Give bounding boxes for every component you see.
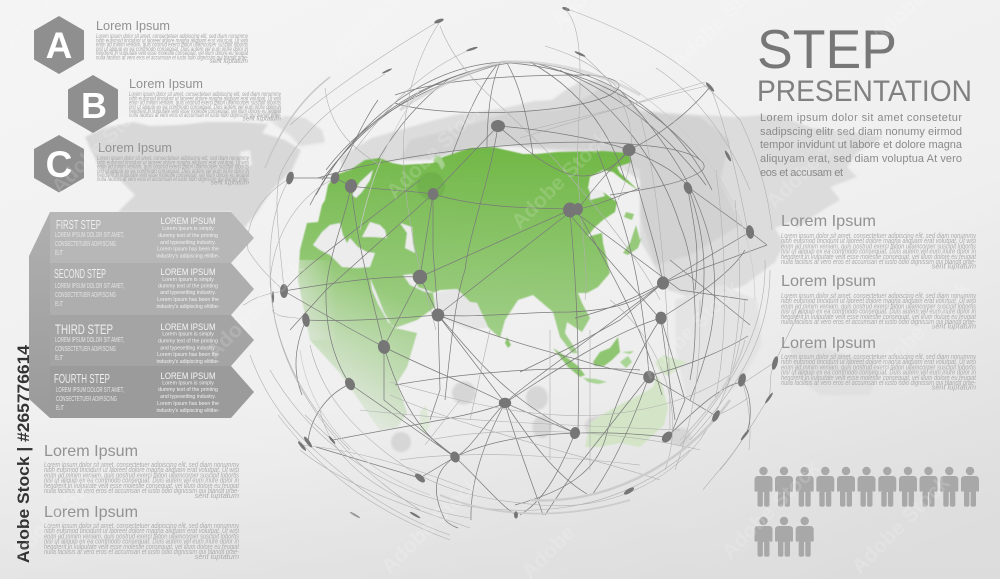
- step 1: and typesetting industry.: [160, 240, 216, 246]
- step 2: Lorem Ipsum has been the: [157, 297, 219, 303]
- text block B: [129, 77, 282, 122]
- right text block 2: [781, 273, 977, 330]
- left text block 2: nibh euismod tincidunt ut laoreet dolore magna aliquam erat volutpat. Ut wisi: [44, 526, 239, 535]
- text block B: Lorem ipsum dolor sit amet, consectetuer adipiscing elit, sed diam nonummy: [129, 91, 282, 98]
- back-of-globe spots: [391, 382, 691, 452]
- text block B: nibh euismod tincidunt ut laoreet dolore magna aliquam erat volutpat. Ut wisi: [129, 95, 281, 102]
- text block C: [97, 141, 250, 186]
- left text block 2: enim ad minim veniam, quis nostrud exerci tation ullamcorper suscipit lobortis: [44, 531, 239, 540]
- text block C: enim ad minim veniam, quis nostrud exerci tation ullamcorper suscipit lobortis: [97, 164, 250, 171]
- left text block 2: sent luptatum: [195, 552, 239, 561]
- folded left edge: [29, 212, 50, 418]
- hexagon badge B: B: [81, 85, 107, 126]
- title: [757, 18, 972, 108]
- right text block 3: [781, 335, 977, 392]
- text block A: nisl ut aliquip ex ea commodo consequat. Duis autem vel eum iriure dolor in: [96, 46, 248, 53]
- grey world map: [85, 80, 883, 452]
- stock watermark: Adobe Stock: [762, 106, 870, 214]
- text block A: Lorem Ipsum: [96, 19, 170, 33]
- seas: [313, 223, 375, 268]
- step 3: and typesetting industry.: [160, 346, 216, 352]
- text block B: enim ad minim veniam, quis nostrud exerci tation ullamcorper suscipit lobortis: [129, 100, 282, 107]
- right text block 1: [781, 213, 977, 270]
- text block B: sent luptatum: [243, 116, 282, 122]
- intro paragraph: aliquyam erat, sed diam voluptua At vero: [760, 153, 962, 165]
- step 4: dummy text of the printing: [158, 387, 218, 393]
- step 1: dummy text of the printing: [158, 233, 218, 239]
- step 2: and typesetting industry.: [160, 290, 216, 296]
- step 3: Lorem Ipsum is simply: [162, 332, 214, 338]
- stock watermark: Adobe Stock: [867, 276, 975, 384]
- step 3: [50, 315, 254, 366]
- text block B: Lorem Ipsum: [129, 77, 203, 91]
- right text block 3: sent luptatum: [932, 382, 976, 392]
- people pictogram: [754, 467, 979, 557]
- right text block 2: sent luptatum: [932, 322, 976, 330]
- stock watermark: Adobe Stock: [47, 91, 155, 199]
- step 4: ELIT: [56, 405, 64, 412]
- stock watermark: Adobe Stock: [847, 471, 955, 579]
- step 1: LOREM IPSUM DOLOR SIT AMET,: [55, 232, 124, 239]
- node dots: [272, 6, 779, 519]
- intro paragraph: eos et accusam et: [760, 167, 843, 179]
- text block A: Lorem ipsum dolor sit amet, consectetuer adipiscing elit, sed diam nonummy: [96, 33, 249, 40]
- stock watermark: Adobe Stock: [7, 456, 115, 564]
- step 2: CONSECTETUER ADIPISCING: [55, 292, 116, 299]
- right text block 2: Lorem Ipsum: [781, 273, 876, 290]
- text block C: sent luptatum: [211, 180, 250, 186]
- text block C: nulla facilisis at vero eros et accumsan et iusto odio dignissim qui blandit prae-: [97, 176, 249, 183]
- left text block 1: sent luptatum: [195, 491, 239, 500]
- step 4: [50, 366, 254, 418]
- step 2: SECOND STEP: [54, 266, 106, 281]
- text block A: nibh euismod tincidunt ut laoreet dolore magna aliquam erat volutpat. Ut wisi: [96, 37, 248, 44]
- left text block 2: nisl ut aliquip ex ea commodo consequat. Duis autem vel eum iriure dolor in: [44, 537, 239, 546]
- left text block 1: [44, 443, 240, 500]
- step 2: industry's adipiscing elitibe-: [157, 304, 220, 310]
- title: PRESENTATION: [757, 75, 972, 108]
- hexagon badge C: [34, 135, 84, 192]
- hexagon badge B: [68, 75, 118, 133]
- outer arcs: [310, 62, 715, 400]
- step 1: Lorem Ipsum has been the: [157, 246, 219, 252]
- text block C: hendrerit in vulputate velit esse molestie consequat, vel illum dolore eu feugiat: [97, 172, 249, 179]
- step 1: FIRST STEP: [56, 217, 101, 232]
- stock watermark: Adobe Stock: [377, 471, 485, 579]
- intro paragraph: tempor invidunt ut labore et dolore magna: [760, 139, 963, 151]
- text block A: enim ad minim veniam, quis nostrud exerci tation ullamcorper suscipit lobortis: [96, 42, 249, 49]
- hexagon badge A: A: [46, 25, 72, 66]
- left text block 1: Lorem Ipsum: [44, 443, 138, 460]
- text block B: nisl ut aliquip ex ea commodo consequat. Duis autem vel eum iriure dolor in: [129, 104, 281, 111]
- text block C: Lorem ipsum dolor sit amet, consectetuer adipiscing elit, sed diam nonummy: [97, 155, 250, 162]
- step 3: LOREM IPSUM DOLOR SIT AMET,: [55, 337, 124, 344]
- step 4: and typesetting industry.: [160, 394, 216, 400]
- right text block 3: Lorem Ipsum: [781, 335, 876, 352]
- step 3: THIRD STEP: [55, 321, 113, 337]
- hexagon badge A: [34, 16, 84, 74]
- text block B: hendrerit in vulputate velit esse molestie consequat, vel illum dolore eu feugiat: [129, 108, 281, 115]
- network globe wireframe: [243, 6, 800, 540]
- step 4: CONSECTETUER ADIPISCING: [56, 396, 117, 403]
- step 4: Lorem Ipsum is simply: [162, 380, 214, 386]
- step 3: industry's adipiscing elitibe-: [157, 359, 220, 365]
- step 4: LOREM IPSUM: [160, 371, 216, 382]
- text block A: sent luptatum: [210, 58, 249, 65]
- connections: [284, 87, 767, 528]
- step 4: industry's adipiscing elitibe-: [157, 408, 220, 414]
- step 4: FOURTH STEP: [54, 371, 110, 386]
- step 4: Lorem Ipsum has been the: [157, 401, 219, 407]
- stock watermark: Adobe Stock: [507, 126, 615, 234]
- right text block 1: sent luptatum: [932, 262, 976, 270]
- step 3: CONSECTETUER ADIPISCING: [55, 346, 116, 353]
- step 1: industry's adipiscing elitibe-: [157, 254, 220, 260]
- step 2: LOREM IPSUM DOLOR SIT AMET,: [55, 283, 124, 290]
- step 2: ELIT: [55, 301, 63, 308]
- step arrows panel: [29, 212, 254, 418]
- left text block 2: [44, 504, 240, 561]
- text block C: nibh euismod tincidunt ut laoreet dolore magna aliquam erat volutpat. Ut wisi: [97, 159, 249, 166]
- left text block 1: nisl ut aliquip ex ea commodo consequat. Duis autem vel eum iriure dolor in: [44, 476, 239, 485]
- step 3: Lorem Ipsum has been the: [157, 352, 219, 358]
- islands: [623, 212, 642, 255]
- stock watermark: Adobe Stock: [382, 96, 490, 204]
- left text block 1: nulla facilisis at vero eros et accumsan et iusto odio dignissim qui blandit prae-: [44, 486, 239, 495]
- stock watermark: Adobe Stock: [637, 276, 745, 384]
- step 1: [50, 212, 254, 263]
- green map of Eurasia and Africa: [298, 147, 687, 447]
- left text block 2: Lorem ipsum dolor sit amet, consectetuer adipiscing elit, sed diam nonummy: [44, 521, 240, 530]
- intro paragraph: sadipscing elitr sed diam nonumy eirmod: [760, 126, 962, 138]
- step 1: ELIT: [55, 250, 63, 257]
- right text block 1: Lorem Ipsum: [781, 213, 876, 230]
- dark green spot: [417, 172, 445, 200]
- stock watermark: Adobe Stock: [202, 256, 310, 364]
- left text block 1: Lorem ipsum dolor sit amet, consectetuer adipiscing elit, sed diam nonummy: [44, 460, 240, 469]
- step 2: LOREM IPSUM: [160, 267, 216, 278]
- title: STEP: [757, 18, 897, 80]
- step 3: ELIT: [55, 355, 63, 362]
- step 2: Lorem Ipsum is simply: [162, 277, 214, 283]
- step 2: dummy text of the printing: [158, 284, 218, 290]
- text block A: nulla facilisis at vero eros et accumsan et iusto odio dignissim qui blandit prae-: [96, 54, 248, 62]
- step 2: [50, 263, 254, 315]
- text block C: Lorem Ipsum: [98, 141, 172, 155]
- text block A: hendrerit in vulputate velit esse molestie consequat, vel illum dolore eu feugiat: [96, 50, 248, 57]
- australia: [585, 375, 668, 447]
- step 4: LOREM IPSUM DOLOR SIT AMET,: [56, 387, 124, 394]
- left text block 2: hendrerit in vulputate velit esse molestie consequat, vel illum dolore eu feugiat: [44, 542, 240, 551]
- left text block 1: enim ad minim veniam, quis nostrud exerci tation ullamcorper suscipit lobortis: [44, 470, 239, 479]
- left text block 1: hendrerit in vulputate velit esse molestie consequat, vel illum dolore eu feugiat: [44, 481, 240, 490]
- left text block 2: nulla facilisis at vero eros et accumsan et iusto odio dignissim qui blandit prae-: [44, 547, 239, 556]
- step 3: LOREM IPSUM: [160, 322, 216, 333]
- text block A: [96, 19, 249, 65]
- stock watermark: Adobe Stock: [717, 456, 825, 564]
- left text block 2: Lorem Ipsum: [44, 504, 138, 521]
- step 3: dummy text of the printing: [158, 338, 218, 344]
- intro paragraph: [760, 112, 963, 179]
- stock id vertical text: Adobe Stock | #265776614: [14, 344, 33, 563]
- left text block 1: nibh euismod tincidunt ut laoreet dolore magna aliquam erat volutpat. Ut wisi: [44, 465, 239, 474]
- step 1: LOREM IPSUM: [160, 216, 216, 227]
- step 1: Lorem Ipsum is simply: [162, 226, 214, 232]
- text block B: nulla facilisis at vero eros et accumsan et iusto odio dignissim qui blandit prae-: [129, 112, 281, 119]
- text block C: nisl ut aliquip ex ea commodo consequat. Duis autem vel eum iriure dolor in: [97, 168, 249, 175]
- step 1: CONSECTETUER ADIPISCING: [55, 241, 116, 248]
- hexagon badge C: C: [46, 144, 72, 185]
- intro paragraph: Lorem ipsum dolor sit amet consetetur: [760, 112, 962, 124]
